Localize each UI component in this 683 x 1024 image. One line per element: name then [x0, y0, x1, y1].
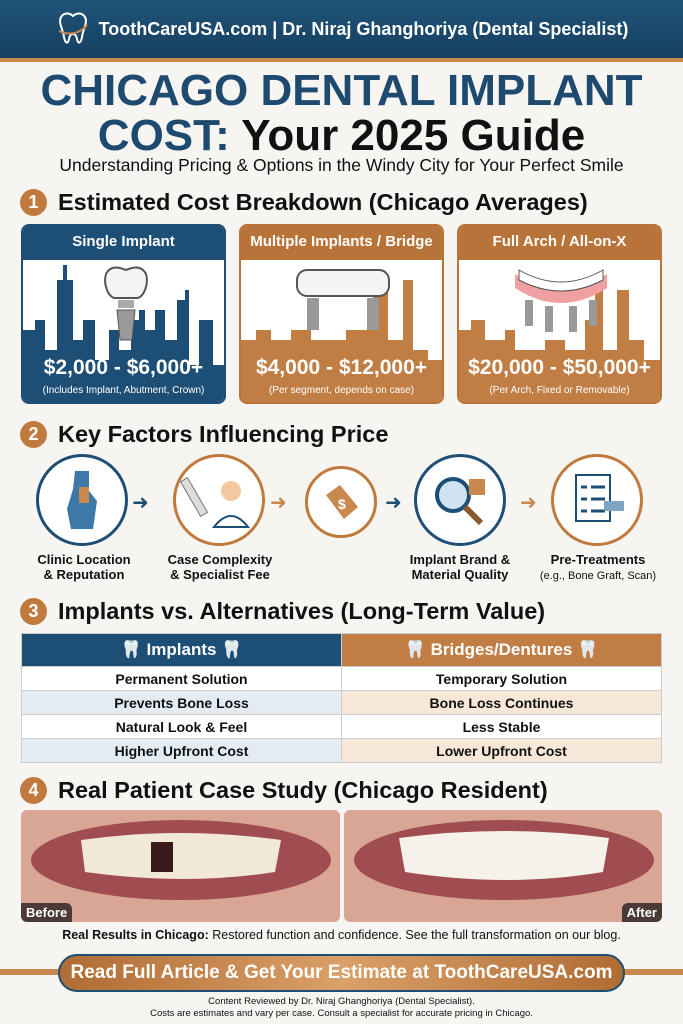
footer note: Costs are estimates and vary per case. Consult a specialist for accurate pricing in Chicago.: [150, 1008, 533, 1019]
card: full arch: (Per Arch, Fixed or Removable): [489, 385, 630, 396]
photo: after: After: [627, 905, 657, 920]
header bar: ToothCareUSA.com | Dr. Niraj Ghanghoriya (Dental Specialist): [99, 18, 628, 38]
comparison table: Prevents Bone Loss: [114, 694, 249, 710]
factor labels: & Reputation: [44, 567, 124, 582]
comparison table: Less Stable: [463, 718, 540, 734]
CTA button: [58, 954, 625, 992]
comparison table: Bone Loss Continues: [430, 694, 573, 710]
footer note: Content Reviewed by Dr. Niraj Ghanghoriya (Dental Specialist).: [208, 996, 475, 1007]
arrow: ➜: [132, 492, 149, 514]
card: multiple implants: $4,000 - $12,000+: [256, 356, 427, 379]
card: multiple implants: Multiple Implants / Bridge: [250, 233, 433, 250]
card: single implant: Single Implant: [72, 233, 175, 250]
text: Material Quality: [412, 567, 508, 582]
text: (e.g., Bone Graft, Scan): [540, 570, 656, 582]
card: single implant: [21, 224, 226, 404]
comparison table: 🦷 Bridges/Dentures 🦷: [405, 640, 598, 659]
comparison table: 🦷 Implants 🦷: [121, 640, 242, 659]
arrow: ➜: [520, 492, 537, 514]
card: single implant: (Includes Implant, Abutment, Crown): [43, 385, 204, 396]
heading 1: 1: [28, 192, 38, 212]
text: & Specialist Fee: [170, 567, 270, 582]
factor: brand: [414, 454, 506, 546]
heading 4: Real Patient Case Study (Chicago Resident): [58, 777, 548, 803]
photo: before: Before: [26, 905, 67, 920]
factor: price tag: [305, 466, 377, 538]
copper divider line: [0, 969, 683, 975]
comparison table: Temporary Solution: [436, 670, 567, 686]
heading 3: Implants vs. Alternatives (Long-Term Value): [58, 598, 545, 624]
comparison table: [21, 633, 662, 763]
text: Implant Brand &: [410, 552, 510, 567]
comparison table: Lower Upfront Cost: [436, 742, 567, 758]
title: CHICAGO DENTAL IMPLANT: [40, 66, 643, 115]
heading 2: Key Factors Influencing Price: [58, 421, 388, 447]
footer note: [150, 996, 533, 1019]
card: multiple implants: (Per segment, depends on case): [269, 385, 414, 396]
title: COST: Your 2025 Guide: [98, 111, 585, 160]
comparison table: Natural Look & Feel: [116, 718, 247, 734]
factor: complexity: [173, 454, 265, 546]
card: full arch: $20,000 - $50,000+: [468, 356, 651, 379]
photo: after: [344, 810, 662, 922]
factor labels: Clinic Location: [37, 552, 131, 567]
icon: tooth logo: [58, 12, 88, 44]
title: [40, 66, 643, 160]
comparison table: Higher Upfront Cost: [115, 742, 248, 758]
factor: location: [36, 454, 128, 546]
icon: single implant: [104, 266, 148, 340]
icon: full arch: [515, 269, 607, 332]
card: single implant: $2,000 - $6,000+: [44, 356, 203, 379]
heading 2: 2: [28, 424, 38, 444]
heading 1: Estimated Cost Breakdown (Chicago Averages): [58, 189, 588, 215]
subtitle: Understanding Pricing & Options in the Windy City for Your Perfect Smile: [59, 155, 624, 175]
icon: bridge: [296, 269, 390, 330]
arrow: ➜: [270, 492, 287, 514]
header bar: [0, 0, 683, 62]
factor labels: [37, 552, 131, 582]
text: Pre-Treatments: [551, 552, 645, 567]
card: full arch: Full Arch / All-on-X: [493, 233, 626, 250]
CTA button: Read Full Article & Get Your Estimate at ToothCareUSA.com: [71, 962, 612, 983]
photo: before: [21, 810, 340, 922]
text: Case Complexity: [168, 552, 272, 567]
factor: price tag: $: [338, 496, 346, 512]
card: full arch: [457, 224, 662, 404]
caption: Real Results in Chicago: Restored function and confidence. See the full transformation on our blog.: [62, 928, 621, 942]
heading 4: 4: [28, 780, 38, 800]
card: multiple implants: [239, 224, 444, 404]
arrow: ➜: [385, 492, 402, 514]
factor: pre-treatments: [551, 454, 643, 546]
comparison table: Permanent Solution: [115, 670, 248, 686]
heading 3: 3: [28, 601, 38, 621]
